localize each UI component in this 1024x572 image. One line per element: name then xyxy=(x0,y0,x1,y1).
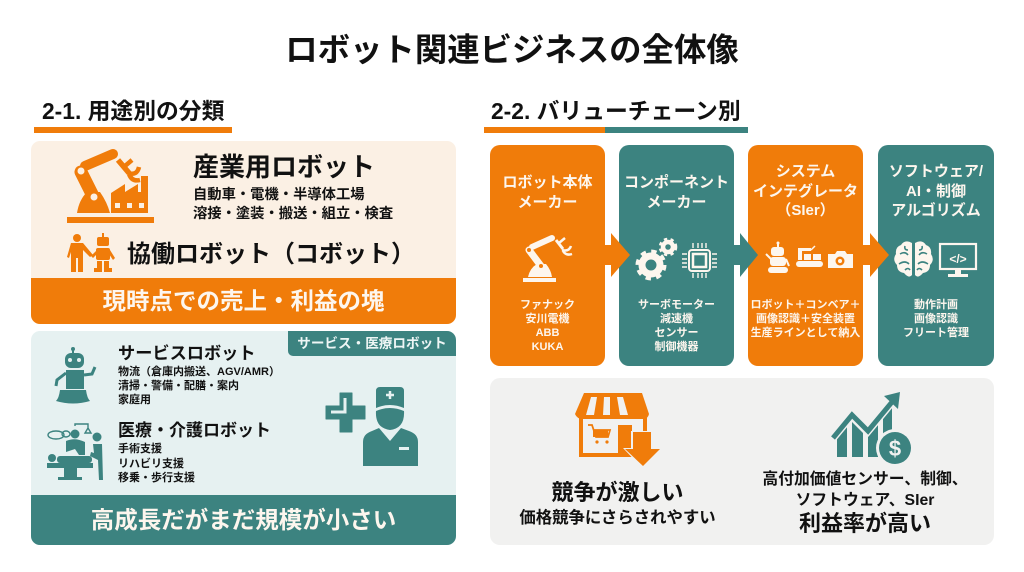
card text: 画像認識 xyxy=(914,313,958,325)
band: growth xyxy=(31,495,456,545)
card text: サーボモーター xyxy=(638,299,715,311)
card: component makers xyxy=(619,145,734,366)
text: industrial uses: 溶接・塗装・搬送・組立・検査 xyxy=(193,206,393,222)
panel: industrial robots xyxy=(31,141,456,324)
heading: industrial robots: 産業用ロボット xyxy=(193,152,375,182)
card text xyxy=(903,298,969,339)
card text: 動作計画 xyxy=(914,299,958,311)
card heading: （SIer） xyxy=(776,202,835,219)
card heading: インテグレータ xyxy=(753,182,858,200)
heading: medical robots: 医療・介護ロボット xyxy=(118,421,271,440)
title: ロボット関連ビジネスの全体像 xyxy=(285,32,739,68)
text: high value items xyxy=(762,470,968,509)
card text: センサー xyxy=(654,327,698,339)
tab: service medical label xyxy=(288,331,456,356)
icon: store with down arrow xyxy=(575,393,660,466)
card heading xyxy=(502,174,592,210)
icon: medical cross and nurse xyxy=(326,387,418,466)
text: service uses: 家庭用 xyxy=(118,394,151,406)
text: service uses: 清掃・警備・配膳・案内 xyxy=(118,380,239,392)
tab: service medical label: サービス・医療ロボット xyxy=(297,336,447,351)
icon: white robot arm xyxy=(523,235,572,282)
arrow: integrators to software xyxy=(863,233,889,277)
card text: 生産ラインとして納入 xyxy=(751,327,860,339)
card text: 画像認識＋安全装置 xyxy=(756,313,855,325)
band: profit: 現時点での売上・利益の塊 xyxy=(102,288,384,314)
text: medical uses: 移乗・歩行支援 xyxy=(118,472,195,484)
arrow: makers to components xyxy=(605,233,630,277)
text: industrial uses xyxy=(193,186,393,222)
text: medical uses: 手術支援 xyxy=(118,443,162,455)
card heading: コンポーネント xyxy=(624,174,729,191)
band: growth: 高成長だがまだ規模が小さい xyxy=(91,507,396,533)
icon: code monitor: </> xyxy=(949,252,967,266)
icon: robot arm and factory xyxy=(67,149,154,223)
card text: ロボット＋コンベア＋ xyxy=(750,299,860,311)
text: high margin: 利益率が高い xyxy=(799,511,931,536)
heading: collaborative robots: 協働ロボット（コボット） xyxy=(127,241,415,268)
text: high value items: 高付加価値センサー、制御、 xyxy=(762,471,968,488)
icon: chip xyxy=(682,243,717,278)
text: service uses xyxy=(118,366,280,406)
card heading: システム xyxy=(776,163,835,180)
card text: 制御機器 xyxy=(654,341,698,353)
card text: 減速機 xyxy=(660,313,693,325)
icon: small robot xyxy=(765,242,790,273)
arrow: components to integrators xyxy=(734,233,758,277)
text: service uses: 物流（倉庫内搬送、AGV/AMR） xyxy=(118,366,280,378)
icon: surgery scene xyxy=(47,423,103,480)
card heading: アルゴリズム xyxy=(891,202,981,219)
card heading xyxy=(889,163,983,219)
icon: brain xyxy=(894,241,933,277)
text: medical uses xyxy=(118,442,195,484)
panel: margin comparison xyxy=(490,378,994,545)
panel: service and medical robots xyxy=(31,331,456,545)
icon: growth chart with coin xyxy=(831,392,911,464)
card heading: ロボット本体 xyxy=(502,174,592,191)
card heading: ソフトウェア/ xyxy=(889,163,983,180)
card text xyxy=(520,298,575,353)
text: medical uses: リハビリ支援 xyxy=(118,458,184,470)
card heading xyxy=(753,163,858,219)
card text: ファナック xyxy=(520,299,575,311)
icon: person and robot xyxy=(67,233,115,272)
text: high value items: ソフトウェア、SIer xyxy=(796,492,934,509)
text: competition detail: 価格競争にさらされやすい xyxy=(519,509,716,527)
heading: 2-2: 2-2. バリューチェーン別 xyxy=(491,98,741,124)
card: robot makers xyxy=(490,145,605,366)
heading: service robots: サービスロボット xyxy=(118,343,256,363)
heading: 2-1 xyxy=(34,98,232,133)
card heading xyxy=(624,174,729,210)
card: system integrators xyxy=(748,145,863,366)
card text xyxy=(750,298,860,339)
icon: gears xyxy=(636,238,678,280)
card text: フリート管理 xyxy=(903,327,969,339)
text: industrial uses: 自動車・電機・半導体工場 xyxy=(193,187,365,203)
card text: ABB xyxy=(536,327,559,339)
icon: conveyor xyxy=(796,246,823,267)
icon: code monitor xyxy=(938,242,978,277)
card heading: メーカー xyxy=(646,194,706,210)
card: software xyxy=(878,145,994,366)
card heading: AI・制御 xyxy=(906,182,966,200)
text: competition heading: 競争が激しい xyxy=(551,480,684,505)
card text: 安川電機 xyxy=(526,313,570,325)
card text: KUKA xyxy=(532,341,563,353)
icon: camera xyxy=(828,251,853,268)
icon: growth chart with coin: $ xyxy=(889,436,901,461)
icon: service robot xyxy=(54,347,96,404)
card text xyxy=(638,298,715,353)
card heading: メーカー xyxy=(517,194,578,210)
band: profit xyxy=(31,278,456,324)
heading: 2-1: 2-1. 用途別の分類 xyxy=(42,98,224,124)
